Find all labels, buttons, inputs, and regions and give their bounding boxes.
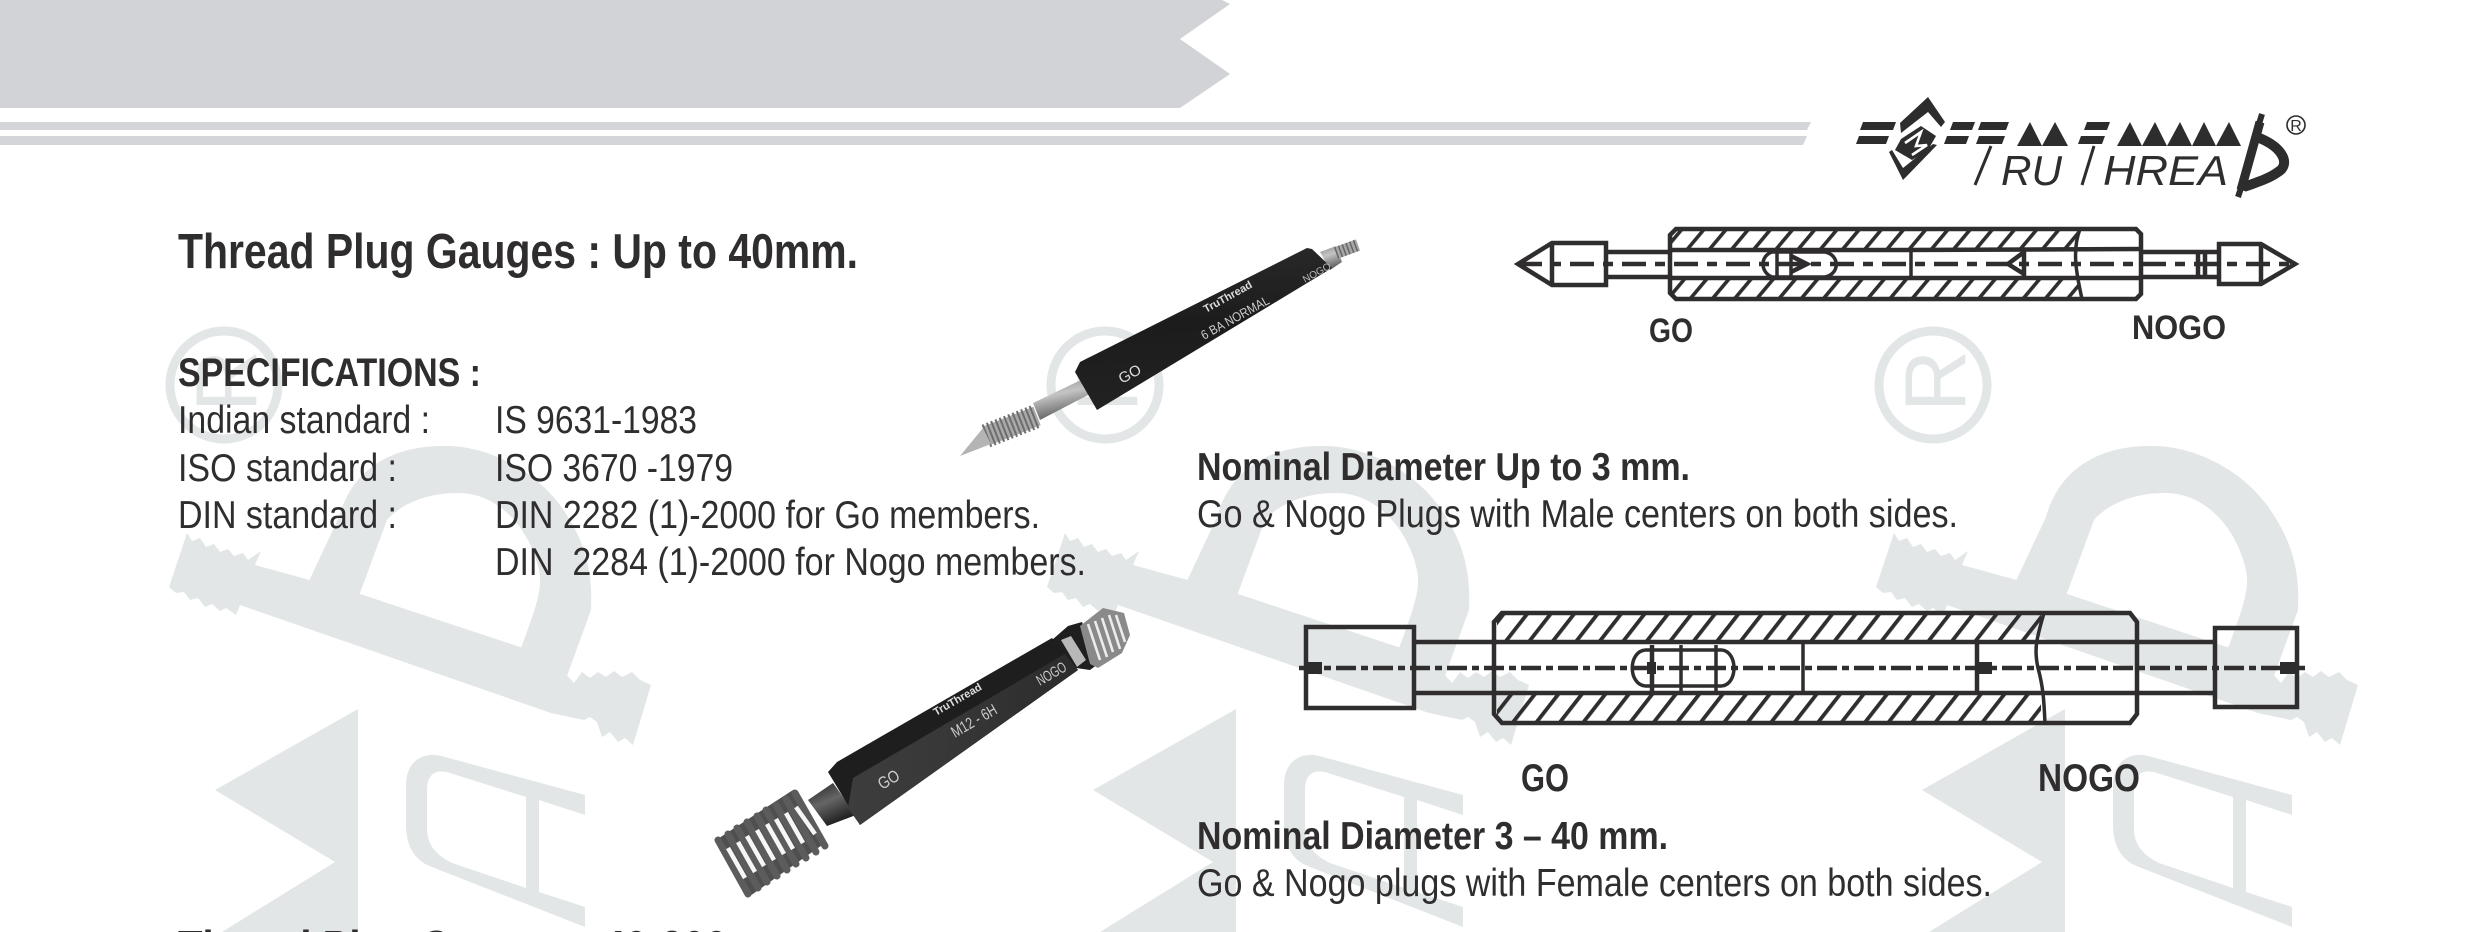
logo wordmark: HREA [2103, 147, 2228, 194]
din standard rows: DIN standard : [178, 494, 397, 537]
small gauge go thread [960, 416, 1037, 456]
large gauge right thread [1052, 608, 1130, 670]
diagram: male centers [1518, 229, 2295, 350]
small gauge labels: NOGO [1301, 261, 1333, 286]
iso standard row: ISO standard : [178, 447, 397, 490]
female diagram outline [1299, 613, 2305, 723]
logo wordmark: RU [2001, 147, 2063, 194]
gauge photo: small thread plug [960, 245, 1358, 456]
watermark 3 [1876, 331, 2358, 932]
specifications [178, 351, 1086, 584]
large gauge labels: M12 - 6H [948, 702, 1000, 741]
nominal diameter up to 3 mm text: Go & Nogo Plugs with Male centers on both sides. [1197, 493, 1958, 536]
iso standard row: ISO 3670 -1979 [495, 447, 733, 490]
small gauge labels: GO [1116, 361, 1144, 387]
watermark 1 [169, 331, 651, 932]
logo registered mark: R [2290, 118, 2302, 135]
male diagram NOGO label: NOGO [2132, 309, 2226, 347]
small gauge shaft [1033, 379, 1090, 420]
female diagram GO label: GO [1521, 757, 1569, 800]
header double rule [0, 122, 1811, 145]
logo registered mark [2287, 116, 2305, 135]
logo wordmark [2001, 147, 2228, 194]
nominal diameter 3-40 mm text: Go & Nogo plugs with Female centers on both sides. [1197, 862, 1992, 905]
logo letter stems [1975, 146, 2094, 185]
female diagram NOGO label: NOGO [2038, 757, 2140, 800]
logo dashes [1856, 122, 2110, 144]
logo thread teeth [2017, 122, 2241, 146]
logo micrometer D [2238, 114, 2284, 197]
watermark 2 [1047, 331, 1529, 932]
watermark 2: R [1060, 350, 1156, 412]
large gauge labels [874, 659, 1070, 793]
din standard rows: DIN 2282 (1)-2000 for Go members. [495, 494, 1040, 537]
large gauge neck [808, 783, 856, 826]
nominal diameter 3-40 mm text [1197, 815, 1992, 905]
small gauge body [1075, 248, 1332, 410]
small gauge labels: 6 BA NORMAL [1198, 293, 1272, 343]
female diagram hatching [1497, 615, 2041, 722]
din standard rows: DIN 2284 (1)-2000 for Nogo members. [495, 541, 1086, 584]
logo: TruThread [1856, 97, 2305, 197]
indian standard row: IS 9631-1983 [495, 399, 697, 442]
large gauge labels: TruThread [932, 681, 984, 719]
iso standard row [178, 447, 733, 490]
watermark 1: R [179, 350, 275, 412]
male diagram GO label: GO [1649, 312, 1693, 350]
logo emblem [1889, 97, 1945, 180]
nominal diameter 3-40 mm text: Nominal Diameter 3 – 40 mm. [1197, 815, 1668, 858]
indian standard row [178, 399, 697, 442]
title: Thread Plug Gauges : Up to 40mm. [178, 225, 858, 279]
male diagram outline [1518, 229, 2295, 299]
watermark 3: R [1888, 350, 1984, 412]
small gauge thread end [1320, 245, 1358, 270]
diagram: female centers [1299, 613, 2305, 800]
small gauge labels: TruThread [1202, 279, 1255, 316]
din standard rows [178, 494, 1086, 584]
small gauge labels [1116, 261, 1333, 387]
gauge photo: large thread plug [716, 608, 1130, 896]
indian standard row: Indian standard : [178, 399, 430, 442]
large gauge left thread [716, 790, 825, 896]
large gauge body [828, 638, 1078, 825]
specifications heading: SPECIFICATIONS : [178, 351, 481, 395]
large gauge labels: GO [874, 766, 903, 793]
header banner [0, 0, 1230, 108]
nominal diameter up to 3 mm text [1197, 446, 1958, 536]
male diagram hatching [1672, 231, 2080, 298]
large gauge labels: NOGO [1034, 659, 1070, 689]
nominal diameter up to 3 mm text: Nominal Diameter Up to 3 mm. [1197, 446, 1690, 489]
